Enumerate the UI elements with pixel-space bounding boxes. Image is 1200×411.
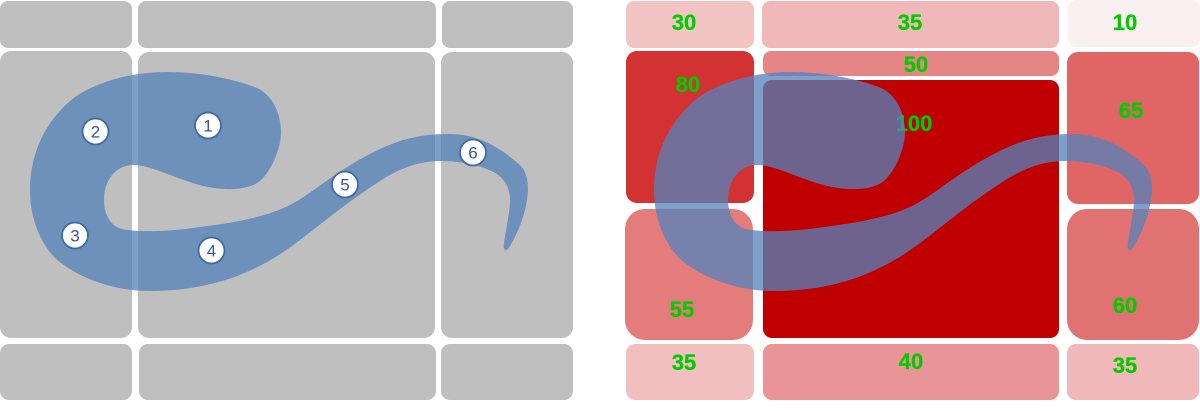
heat values: 35 [672,350,696,375]
heat values: 35 [898,10,922,35]
heat values: 55 [670,297,694,322]
heat values: 10 [1113,10,1137,35]
marker 3: 3 [70,226,80,246]
marker 4 [198,238,224,264]
marker 3 [62,222,88,248]
marker 2 [82,118,108,144]
marker 5 [332,172,358,198]
heat values: 60 [1113,293,1137,318]
marker 1 [195,112,221,138]
heat values: 35 [1113,353,1137,378]
heat values: 65 [1119,98,1143,123]
heat values [670,10,1143,378]
icon: blue curved path over heat map [654,72,1152,291]
heat values: 40 [899,349,923,374]
marker 2: 2 [91,122,100,142]
heat values: 100 [896,111,932,136]
panel: grey zone grid [0,1,573,400]
icon: blue curved path over grey grid [30,72,528,291]
marker 1: 1 [203,116,213,136]
marker 6: 6 [468,144,478,162]
marker 6 [460,140,486,166]
heat values: 80 [676,72,700,97]
panel: red heat map grid [625,0,1200,400]
marker 4: 4 [207,242,216,260]
heat values: 50 [904,52,928,77]
marker 5: 5 [340,176,350,194]
heat values: 30 [672,10,696,35]
